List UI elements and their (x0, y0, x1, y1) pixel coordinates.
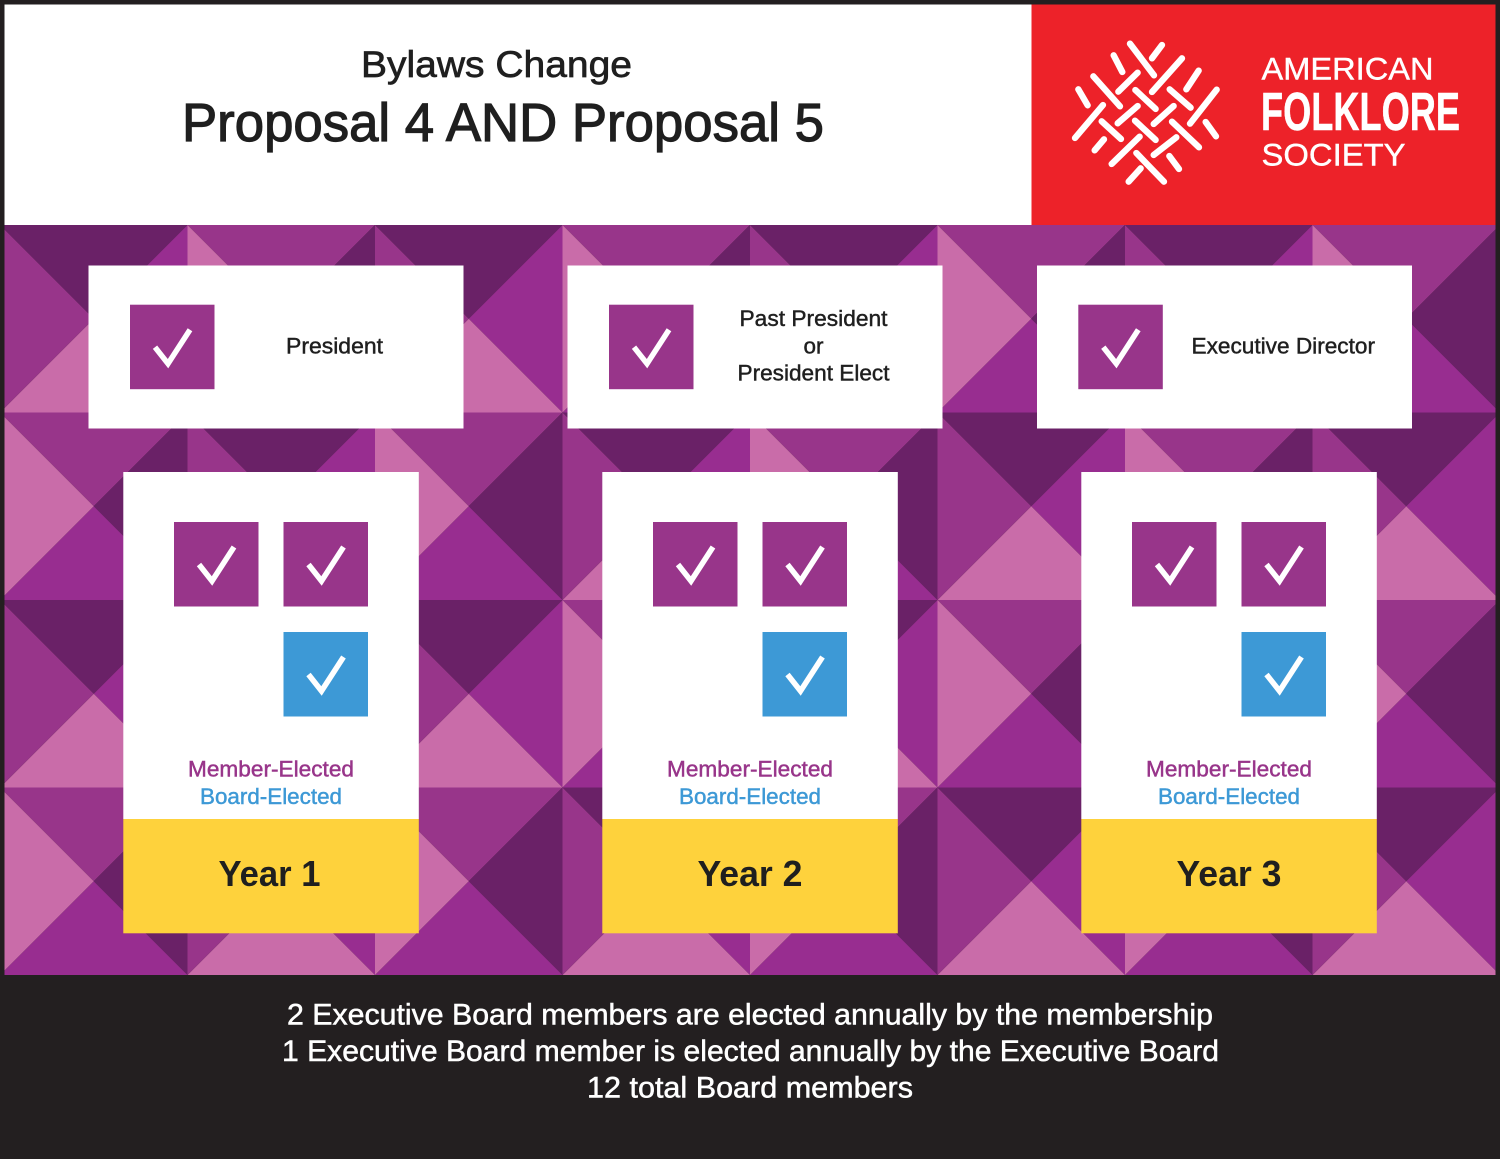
logo wordmark: Society: SOCIETY (1262, 136, 1406, 172)
panel: Year 1 (123, 472, 419, 933)
icon: member-elected check box (762, 522, 847, 606)
icon: member-elected check box (653, 522, 738, 606)
subtitle: Bylaws Change (361, 44, 632, 85)
year band (602, 819, 898, 933)
label: Past President or President Elect (738, 306, 890, 386)
panel: President officer card (88, 266, 464, 428)
year label: Year 1 (218, 853, 320, 894)
year label: Year 2 (698, 853, 802, 894)
icon: member-elected check box (1132, 522, 1216, 606)
year band (123, 819, 419, 933)
legend: board-elected: Board-Elected (200, 784, 342, 809)
legend: member-elected: Member-Elected (667, 756, 833, 782)
icon: member-elected check box (284, 522, 368, 606)
label: Past President or President Elect: Past President (740, 306, 888, 331)
panel: Year 2 (602, 472, 898, 933)
panel: Year 3 (1081, 472, 1377, 933)
footer summary text: 1 Executive Board member is elected annually by the Executive Board (282, 1035, 1219, 1068)
panel: American Folklore Society logo (1032, 4, 1496, 225)
panel: title header (4, 4, 1032, 225)
icon: purple check box (130, 305, 214, 389)
icon: board-elected check box (762, 632, 847, 716)
label: President: President (286, 334, 384, 358)
icon: purple check box (609, 305, 694, 389)
title: Proposal 4 AND Proposal 5 (182, 93, 824, 153)
geometric triangle background pattern (0, 225, 1500, 975)
legend: member-elected: Member-Elected (1146, 756, 1312, 782)
footer summary text: 2 Executive Board members are elected annually by the membership (287, 998, 1213, 1032)
icon: board-elected check box (1242, 632, 1326, 716)
label: Executive Director: Executive Director (1192, 334, 1376, 358)
legend: board-elected: Board-Elected (679, 784, 821, 809)
icon: purple check box (1078, 305, 1163, 389)
panel: Executive Director officer card (1037, 266, 1412, 428)
legend: member-elected: Member-Elected (188, 756, 354, 782)
label: Past President or President Elect: President Elect (738, 360, 890, 386)
icon: member-elected check box (1242, 522, 1326, 606)
year label: Year 3 (1176, 853, 1282, 894)
icon: member-elected check box (174, 522, 258, 606)
footer summary text: 12 total Board members (587, 1072, 913, 1104)
legend: board-elected: Board-Elected (1158, 784, 1300, 809)
footer summary text (282, 998, 1219, 1104)
year band (1081, 819, 1377, 933)
icon: board-elected check box (284, 632, 368, 716)
label: Past President or President Elect: or (804, 334, 824, 358)
logo wordmark: American: AMERICAN (1262, 50, 1434, 86)
panel: Past President or President Elect officer card (568, 266, 942, 428)
icon: woven basket mark (1075, 44, 1217, 182)
